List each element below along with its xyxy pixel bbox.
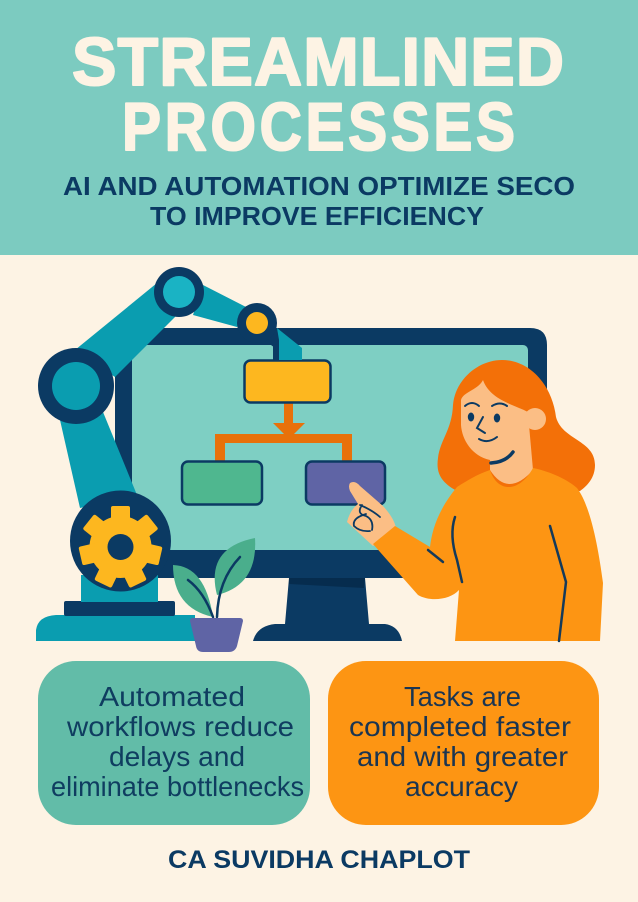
panel: tasks faster: accuracy	[405, 771, 518, 802]
subtitle	[63, 173, 575, 231]
joint: elbow	[38, 348, 114, 424]
panel: automated workflows: delays and	[109, 741, 245, 772]
panel: automated workflows	[38, 661, 310, 825]
ear	[524, 408, 546, 430]
box: purple	[306, 462, 385, 504]
icon: gear	[70, 490, 171, 592]
joint: top	[154, 267, 204, 317]
sweater fold lines	[428, 517, 566, 641]
leaf: left	[173, 565, 213, 617]
potted plant	[173, 538, 255, 652]
neck	[490, 425, 533, 484]
joint: wrist	[237, 303, 277, 343]
illustration: computer monitor	[115, 328, 547, 641]
face	[461, 380, 528, 460]
box: yellow	[244, 360, 330, 402]
author name: CA SUVIDHA CHAPLOT	[168, 846, 470, 874]
flowchart on screen	[182, 360, 385, 504]
panel: automated workflows: workflows reduce	[66, 711, 294, 742]
connector lines	[215, 403, 352, 462]
title	[72, 24, 564, 165]
panel: tasks faster: Tasks are	[404, 681, 521, 712]
box: green	[182, 462, 262, 504]
panel: tasks faster: and with greater	[357, 741, 568, 772]
subtitle: AI AND AUTOMATION OPTIMIZE SECO	[63, 173, 575, 201]
arm base	[36, 615, 195, 641]
person pointing at screen	[347, 360, 603, 641]
panel: automated workflows: eliminate bottlenecks	[51, 771, 304, 802]
panel: automated workflows: Automated	[99, 681, 245, 712]
title: STREAMLINED	[72, 24, 564, 100]
panel: tasks faster: completed faster	[349, 711, 571, 742]
arm segments	[60, 412, 137, 508]
subtitle: TO IMPROVE EFFICIENCY	[150, 203, 484, 231]
robotic arm	[36, 267, 302, 641]
hand	[347, 482, 396, 546]
leaf: right	[215, 538, 255, 595]
panel: header	[0, 0, 638, 255]
facial features	[465, 403, 513, 463]
hair	[438, 360, 595, 491]
pot	[190, 618, 243, 652]
title: PROCESSES	[122, 90, 515, 165]
panel: tasks faster	[328, 661, 599, 825]
sweater	[373, 468, 603, 641]
